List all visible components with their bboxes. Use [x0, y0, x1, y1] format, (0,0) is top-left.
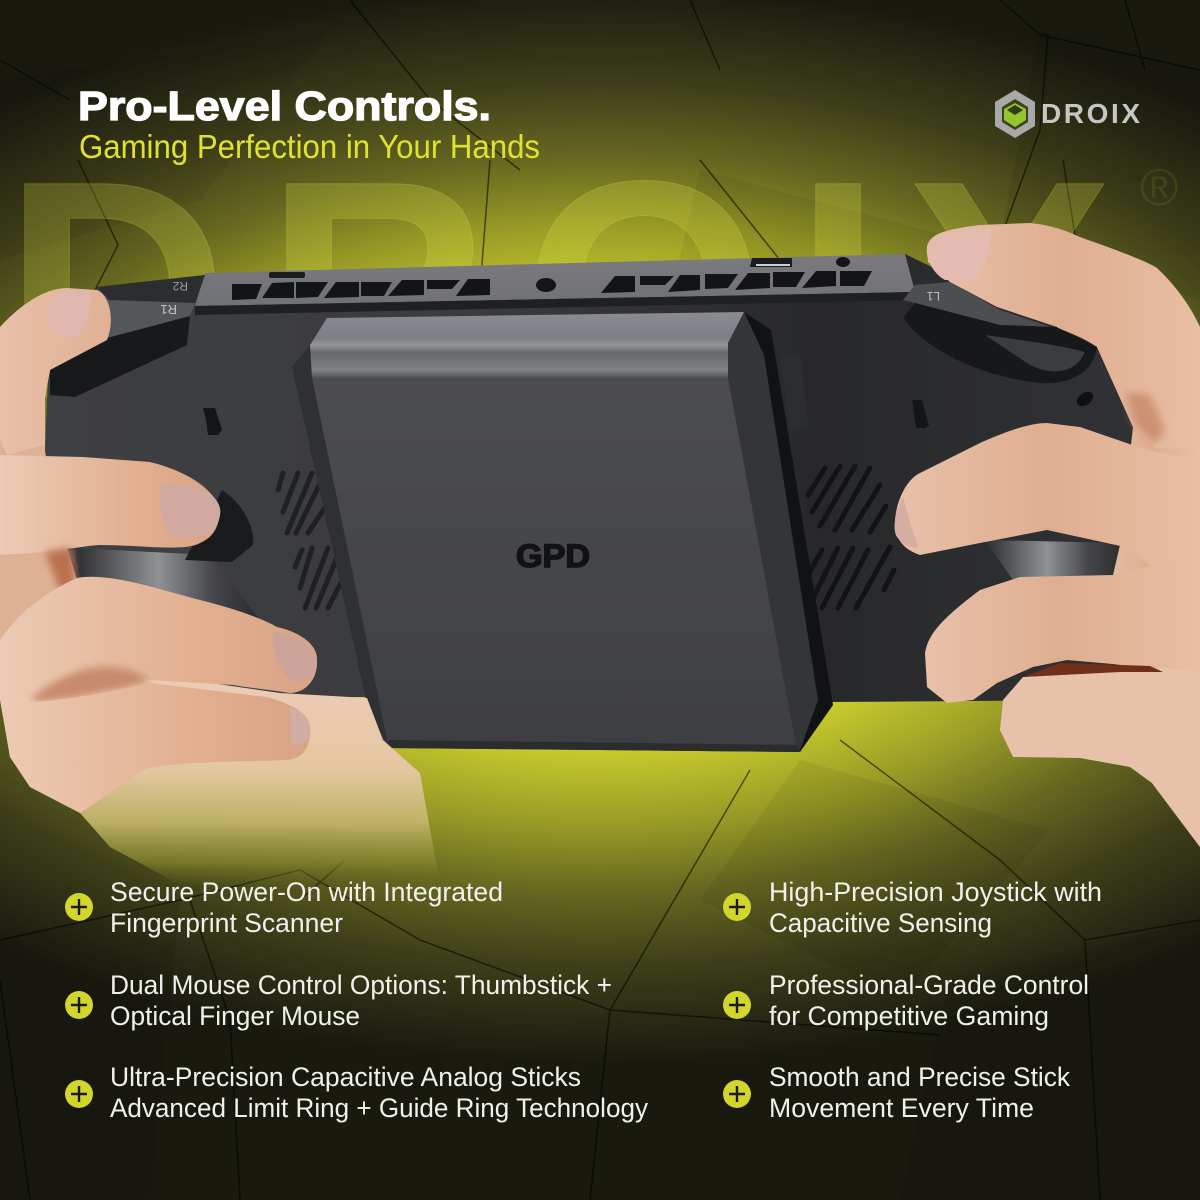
trigger label L1: L1: [926, 289, 940, 303]
logo: DROIX: [995, 90, 1140, 138]
right wrist and palm: [1097, 327, 1200, 847]
feature text: Capacitive Sensing: [769, 908, 992, 938]
right middle finger: [925, 555, 1200, 703]
feature text: Advanced Limit Ring + Guide Ring Technology: [110, 1093, 649, 1123]
feature text: Secure Power-On with Integrated: [110, 877, 503, 907]
dock face: [312, 378, 796, 745]
icon: plus: [723, 1080, 751, 1108]
left thumb nail: [160, 483, 220, 538]
dock logo: GPD: GPD: [516, 538, 590, 574]
left lower nail: [290, 707, 310, 745]
feature text: for Competitive Gaming: [769, 1001, 1049, 1031]
centre hole: [536, 278, 556, 292]
feature list: left column: [65, 877, 649, 1123]
dock top bevel: [310, 312, 744, 378]
right web shadow: [1125, 392, 1165, 445]
feature text: Smooth and Precise Stick: [769, 1062, 1071, 1092]
left thumb: [0, 455, 219, 555]
feature text: Fingerprint Scanner: [110, 908, 343, 938]
right analog stick: [985, 540, 1123, 580]
dock left chamfer: [292, 318, 388, 745]
back dock module: [292, 312, 833, 752]
subtitle: Gaming Perfection in Your Hands: [79, 128, 540, 165]
feature: dual mouse: [65, 970, 612, 1031]
left trigger: [50, 275, 205, 397]
trigger label R2: R2: [172, 279, 188, 293]
right thumb nail: [895, 497, 918, 548]
left hand: [0, 288, 440, 885]
console body: [45, 254, 1145, 752]
feature: joystick: [723, 877, 1102, 938]
icon: plus: [65, 893, 93, 921]
feature list: right column: [723, 877, 1102, 1123]
feature text: Optical Finger Mouse: [110, 1001, 360, 1031]
right index finger: [927, 223, 1200, 450]
left gap shadow: [33, 667, 150, 702]
right index nail: [927, 228, 991, 280]
left lower finger: [0, 683, 310, 813]
dock black vent side: [744, 312, 833, 752]
right trigger: [903, 282, 1097, 383]
right gap shadow: [1023, 663, 1163, 677]
dock side fin: [780, 355, 809, 432]
icon: hexagon cube: [995, 90, 1035, 138]
left index nail: [47, 290, 91, 338]
feature: professional control: [723, 970, 1089, 1031]
right thumb: [895, 423, 1200, 600]
right grip vents: [808, 466, 894, 608]
feature: smooth movement: [723, 1062, 1071, 1123]
feature text: Ultra-Precision Capacitive Analog Sticks: [110, 1062, 581, 1092]
right lower finger: [1000, 668, 1200, 847]
left d-button: [185, 490, 253, 562]
icon: plus: [65, 991, 93, 1019]
console top edge: [195, 254, 915, 306]
dock bottom edge: [388, 740, 800, 752]
feature text: Professional-Grade Control: [769, 970, 1089, 1000]
top vents right: [601, 271, 872, 293]
icon: plus: [723, 893, 751, 921]
top vents left: [232, 279, 490, 300]
left analog stick: [75, 548, 260, 697]
watermark: DROIX: DROIX: [4, 116, 1114, 463]
handheld device: [45, 254, 1145, 752]
left index finger: [0, 288, 111, 455]
icon: plus: [723, 991, 751, 1019]
logo wordmark: DROIX: [1041, 98, 1140, 129]
left web shadow: [45, 548, 76, 590]
left middle finger: [0, 577, 317, 700]
left palm lower: [0, 667, 440, 885]
left wrist: [0, 327, 80, 690]
feature text: Movement Every Time: [769, 1093, 1034, 1123]
audio jack: [836, 257, 850, 267]
dock right bevel strip: [728, 312, 818, 750]
feature text: Dual Mouse Control Options: Thumbstick +: [110, 970, 612, 1000]
icon: plus: [65, 1080, 93, 1108]
top edge shadow: [195, 292, 918, 315]
USB port: [750, 258, 792, 267]
feature: analog sticks: [65, 1062, 649, 1123]
left back paddle: [203, 408, 222, 435]
trigger label R1: R1: [160, 302, 177, 317]
watermark registered mark: ®: [1140, 159, 1178, 217]
title: Pro-Level Controls.: [78, 83, 491, 129]
left middle nail: [274, 632, 317, 682]
feature text: High-Precision Joystick with: [769, 877, 1102, 907]
side hole: [1074, 389, 1096, 409]
right hand: [895, 223, 1200, 847]
right back paddle: [912, 400, 929, 428]
left grip vents: [278, 473, 345, 608]
card slot: [269, 272, 305, 278]
feature: fingerprint scanner: [65, 877, 503, 938]
